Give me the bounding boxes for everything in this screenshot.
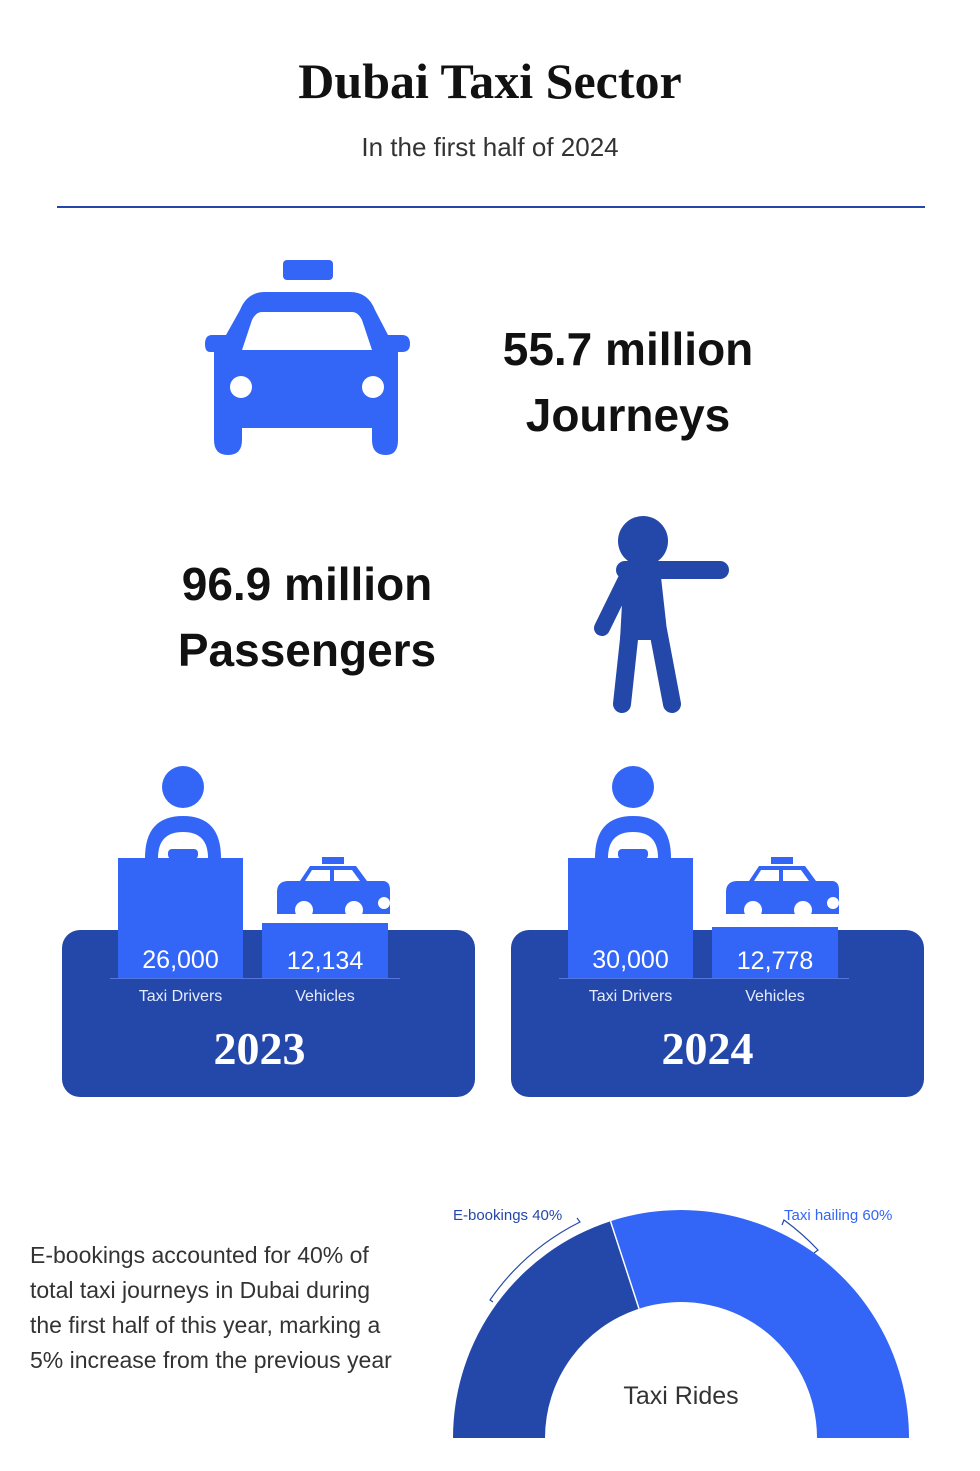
year label: 2023	[214, 1023, 306, 1074]
text block: e-bookings: E-bookings accounted for 40% of	[30, 1242, 369, 1268]
panel: 2023: Vehicles	[295, 988, 355, 1005]
subtitle: In the first half of 2024	[361, 132, 619, 162]
chart: half donut	[453, 1207, 909, 1438]
year label: 2024	[662, 1023, 754, 1074]
bar: drivers: 26,000	[142, 946, 219, 974]
bar: drivers: 30,000	[592, 946, 669, 974]
bar: vehicles: 12,134	[287, 947, 363, 975]
panel: 2023	[62, 766, 475, 1097]
stat: journeys: 55.7 million	[503, 323, 753, 375]
text block: e-bookings: 5% increase from the previous year	[30, 1347, 392, 1373]
bar: vehicles: 12,778	[737, 947, 813, 975]
stat: passengers: 96.9 million	[182, 558, 432, 610]
bar: vehicles	[262, 923, 388, 978]
panel: 2023: Taxi Drivers	[139, 988, 222, 1005]
panel: 2024: Vehicles	[745, 988, 805, 1005]
chart: half donut: Taxi Rides	[623, 1382, 739, 1410]
icon: taxi small	[726, 857, 839, 914]
bar: vehicles	[712, 927, 838, 978]
icon: driver	[595, 766, 839, 914]
icon: person hailing	[594, 516, 729, 713]
chart: half donut: Taxi hailing 60%	[784, 1207, 892, 1224]
text block: e-bookings: total taxi journeys in Dubai during	[30, 1277, 370, 1303]
stat: passengers	[178, 558, 436, 676]
icon: driver	[145, 766, 390, 914]
stat: passengers: Passengers	[178, 624, 436, 676]
panel: 2024	[511, 766, 924, 1097]
icon: taxi small	[277, 857, 390, 914]
panel: 2024: Taxi Drivers	[589, 988, 672, 1005]
bar: drivers	[118, 858, 243, 978]
text block: e-bookings: the first half of this year, marking a	[30, 1312, 380, 1338]
text block: e-bookings	[30, 1242, 392, 1373]
bar: drivers	[568, 858, 693, 978]
stat: journeys	[503, 323, 753, 441]
title: Dubai Taxi Sector	[298, 53, 682, 109]
chart: half donut: E-bookings 40%	[453, 1207, 562, 1224]
stat: journeys: Journeys	[526, 389, 730, 441]
icon: big taxi	[205, 260, 410, 455]
